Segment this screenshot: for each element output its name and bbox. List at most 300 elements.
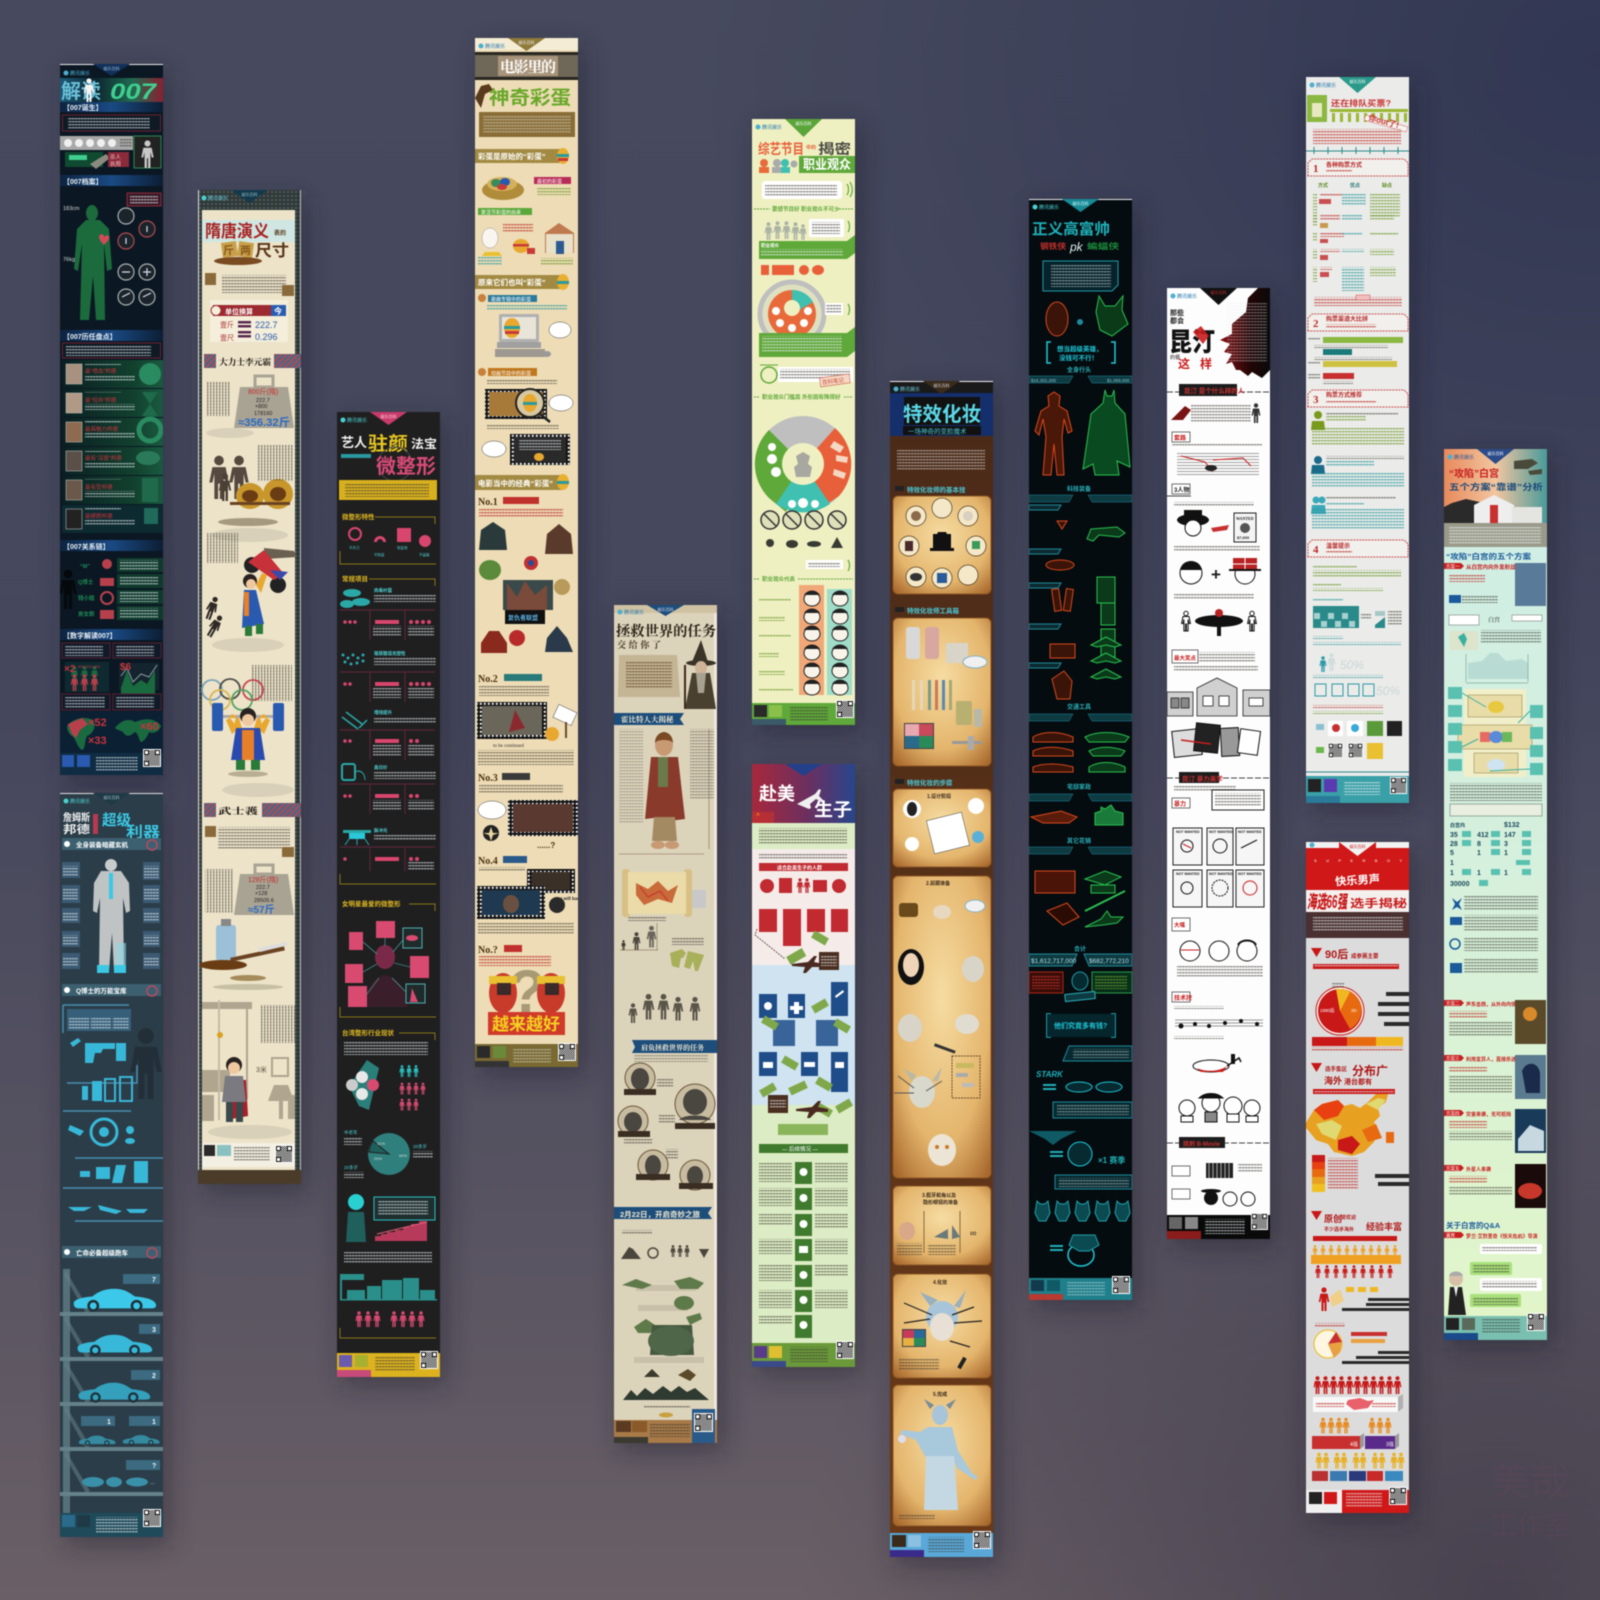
green bar: — 后续情况 — xyxy=(782,1145,819,1153)
weight graphic: 222.7 xyxy=(256,885,270,891)
watermark: studio mark xyxy=(1480,1460,1571,1583)
section 3: 特效化妆的步骤 xyxy=(907,778,953,787)
olympic rings xyxy=(202,679,263,710)
plan 5: 外星人来袭 xyxy=(1466,1166,1491,1173)
section 2 xyxy=(1308,314,1408,331)
tag xyxy=(478,294,537,303)
warrior: 3米 xyxy=(256,1065,267,1074)
sign xyxy=(545,704,577,741)
apps xyxy=(1313,705,1402,759)
section 4: 4 xyxy=(1313,544,1319,556)
recommendation 2 xyxy=(1311,456,1404,487)
footer xyxy=(60,1509,163,1537)
heading: 武士彟: 武士彟 xyxy=(218,806,259,816)
fence line xyxy=(1306,147,1409,154)
stethoscope and note: 百科笔记 xyxy=(822,376,845,387)
header tab: 娱乐百科 xyxy=(242,191,258,197)
intro box xyxy=(339,480,437,500)
footer xyxy=(890,1531,993,1557)
panel: step 1 design: 1.设计阶段 xyxy=(927,793,951,800)
red scene xyxy=(1174,1036,1241,1072)
icons: attribute circles xyxy=(118,208,155,305)
hero header: 腾讯娱乐 xyxy=(1454,454,1474,461)
No.7: No.? xyxy=(478,945,498,956)
relationship rows: Q博士 xyxy=(78,578,94,586)
table header: 缺点 xyxy=(1382,182,1392,189)
section 3: 电影当中的经典“彩蛋” xyxy=(478,478,553,488)
heading: QA: 关于白宫的Q&A xyxy=(1446,1220,1501,1230)
weight graphic xyxy=(234,376,294,429)
motorcycle xyxy=(244,548,297,593)
footer xyxy=(614,1409,717,1443)
note xyxy=(825,303,850,315)
tag xyxy=(478,368,537,377)
icons row xyxy=(761,265,824,275)
red bar xyxy=(759,863,848,872)
tags xyxy=(759,999,853,1117)
QA speaker: 罗兰·艾默里奇《惊天危机》导演 xyxy=(1466,1233,1538,1240)
tag: 复活节彩蛋的由来 xyxy=(481,209,521,216)
film and alarm xyxy=(478,800,578,850)
annotations xyxy=(619,729,714,824)
bracket slogan: 想当超级英雄， xyxy=(1057,344,1102,353)
list: six actors: 最“嗜血”邦德 xyxy=(85,367,117,375)
icon: egg xyxy=(557,148,569,164)
section bar: 昆汀 暴力美学 xyxy=(1182,774,1223,783)
stacked bar xyxy=(1312,1037,1403,1051)
title xyxy=(1307,95,1408,132)
item 5: 脉冲光: 脉冲光 xyxy=(374,827,388,834)
info bar xyxy=(1063,1046,1132,1061)
plan 4 xyxy=(1444,1109,1546,1153)
journey map xyxy=(622,1277,709,1418)
section 2: 原来它们也叫“彩蛋” xyxy=(478,277,546,287)
figure: Iron Man xyxy=(1035,392,1072,475)
title: 还在排队买票? xyxy=(1331,98,1391,108)
wanted icons xyxy=(1181,839,1257,896)
title: 正义高富帅 xyxy=(1032,220,1110,238)
footer xyxy=(1306,772,1409,803)
gear xyxy=(1029,505,1075,699)
section 2: 特效化妆师工具箱 xyxy=(907,606,960,615)
people counts xyxy=(399,1065,426,1110)
faces xyxy=(1180,940,1257,961)
room scene xyxy=(202,1002,295,1121)
header tab xyxy=(756,119,822,137)
heading: 原创: 原创 xyxy=(1324,1213,1342,1224)
label: 合计: $1,612,717,000 xyxy=(1031,958,1077,965)
item 3: 埋线 xyxy=(340,709,436,760)
figures and hammers xyxy=(209,456,293,526)
boy xyxy=(242,573,267,636)
No.1 xyxy=(478,497,563,517)
numbers: 1 xyxy=(1477,870,1481,877)
icons: prohibitions xyxy=(761,511,846,529)
item 4: 美白 xyxy=(340,764,436,814)
text xyxy=(1174,786,1236,792)
title: 钢铁侠 xyxy=(1040,241,1066,251)
section 2 xyxy=(475,274,569,290)
text column 4 xyxy=(261,1005,295,1043)
legend xyxy=(1312,1155,1358,1192)
illustration: Avengers xyxy=(479,522,573,653)
bracket slogan: 没钱可不行！ xyxy=(1059,353,1098,362)
header tab xyxy=(64,64,130,77)
item 3: 埋线: 埋线提升 xyxy=(374,709,392,716)
tag: 技术控 xyxy=(1174,994,1192,1002)
section 2: 2 xyxy=(1313,318,1319,330)
header tab xyxy=(340,412,407,425)
numbers: 8 xyxy=(1477,841,1481,848)
relationship rows: 钱小姐 xyxy=(78,594,95,602)
text xyxy=(634,1055,708,1062)
section heading: Q博士 xyxy=(62,984,161,996)
watermark: studio mark: magi-design.com xyxy=(1480,1571,1564,1583)
building and basketball: ×1 赛季 xyxy=(1098,1155,1125,1165)
panel: step 4 makeup: 4.化妆 xyxy=(933,1279,947,1286)
list: six actors: 最有“深度”邦德 xyxy=(85,454,122,462)
numbers: 1 xyxy=(1477,850,1481,857)
numbers: 30000 xyxy=(1450,881,1470,888)
scroll roller xyxy=(198,1170,301,1184)
section: 女明星 xyxy=(342,899,435,911)
header tab: 腾讯娱乐 xyxy=(1039,204,1059,211)
section 1 xyxy=(1308,159,1408,176)
ribbons xyxy=(618,1089,715,1189)
title xyxy=(341,433,437,481)
plus group xyxy=(1174,546,1261,584)
scaffold xyxy=(60,1269,163,1513)
conversion box: 222.7 xyxy=(255,320,278,330)
intro box xyxy=(1043,261,1118,291)
QA speaker xyxy=(1444,1232,1538,1240)
section 4 xyxy=(1308,540,1408,557)
section: 档案 xyxy=(60,175,163,186)
portraits xyxy=(618,1063,715,1190)
wanted captions: NOT WANTED xyxy=(1176,830,1200,834)
extras: guard icons xyxy=(1450,896,1538,973)
cowboy and wanted: WANTED xyxy=(1236,516,1254,521)
gadgets: pipeline and items xyxy=(63,1005,163,1221)
title: 职业观众 xyxy=(803,157,851,172)
section: 关系链 xyxy=(60,540,163,551)
gear green xyxy=(1087,527,1125,679)
item 1: 肉毒杆菌: 肉毒杆菌 xyxy=(374,587,392,594)
tag: 歌曲专辑中的彩蛋 xyxy=(491,296,531,303)
diagram: face procedures xyxy=(345,921,429,1007)
table xyxy=(1450,804,1542,816)
text column 3 xyxy=(252,665,292,701)
section bar xyxy=(1167,384,1270,396)
panel: step 3 teeth and horns: ∞ xyxy=(970,1228,976,1238)
item 1: 肉毒杆菌 xyxy=(340,587,436,640)
follow-up rows xyxy=(759,1162,848,1338)
section: 常规项目: 常规项目 xyxy=(342,574,368,583)
right labels xyxy=(1342,1351,1409,1364)
bubble xyxy=(549,395,573,411)
section: 诞生: 【007诞生】 xyxy=(63,103,103,112)
footer xyxy=(1444,1313,1547,1340)
section: 女明星: 女明星最爱的微整形 xyxy=(342,899,401,908)
bar chart xyxy=(1308,337,1403,384)
silhouettes row xyxy=(629,994,700,1023)
section heading: 全身装备 xyxy=(62,838,161,850)
section 1: 1 xyxy=(1313,163,1318,175)
No.4: No.4 xyxy=(478,856,498,867)
vertical text xyxy=(206,382,230,416)
section heading xyxy=(754,393,853,401)
wanted captions: NOT WANTED xyxy=(1209,872,1233,876)
plan 2: 方案二 xyxy=(1446,1000,1460,1007)
title: 隋唐演义 xyxy=(205,221,269,241)
title xyxy=(202,220,295,265)
item 2: 玻尿酸 xyxy=(340,650,436,702)
label: 全身行头: $16,302,200 xyxy=(1031,378,1057,383)
red header: 娱乐百科 xyxy=(1350,843,1366,849)
panel: step 1 design xyxy=(893,789,991,867)
section bar xyxy=(1167,1137,1270,1148)
portrait box xyxy=(134,136,161,168)
film credits xyxy=(510,434,570,465)
wanted captions xyxy=(1176,830,1262,876)
panel: step 3 teeth and horns: 3.假牙和角以及 xyxy=(922,1192,956,1199)
tag xyxy=(1172,918,1190,931)
plan 2: 声东击西，从外向内强攻 xyxy=(1466,1001,1521,1008)
pin and note xyxy=(1449,595,1498,603)
list: six actors: 最有型邦德 xyxy=(85,483,113,491)
panel: 解读007 infographic xyxy=(59,63,164,776)
shirts xyxy=(670,937,704,971)
city skyline xyxy=(340,1274,437,1300)
bubble xyxy=(549,322,571,338)
section: 常规项目 xyxy=(342,574,435,586)
intro xyxy=(897,450,985,470)
show boxes xyxy=(1312,1433,1399,1449)
tag xyxy=(478,208,532,216)
heading: 原创: 受欢迎 xyxy=(1341,1214,1356,1221)
icons: warnings xyxy=(766,537,843,548)
callout xyxy=(127,193,161,206)
title xyxy=(1032,220,1119,254)
people: red tall xyxy=(1314,1376,1401,1394)
label: 合计 xyxy=(1029,945,1132,966)
figure: suited man xyxy=(93,859,130,973)
section bar: 挑刺 B-Movie xyxy=(1183,1140,1221,1148)
No.7 xyxy=(478,945,551,966)
panel: step 3 teeth and horns: 隐形眼镜的准备 xyxy=(923,1199,958,1206)
weightlifter xyxy=(212,703,284,777)
label: 全身行头: 全身行头 xyxy=(1067,366,1091,374)
title: 邦德 xyxy=(63,822,90,836)
caption xyxy=(487,379,557,384)
illustration: eggs with question mark: ? xyxy=(509,958,545,1025)
heads xyxy=(1046,296,1128,336)
title band xyxy=(752,764,855,823)
text column xyxy=(205,869,233,913)
title: “攻陷”白宫 xyxy=(1449,467,1499,480)
title: 一场神奇的变脸魔术 xyxy=(908,426,967,436)
wanted captions: NOT WANTED xyxy=(1209,830,1233,834)
section 2: 购票渠道大比拼 xyxy=(1326,315,1368,323)
poster xyxy=(1515,563,1546,606)
red header: 快乐男声 xyxy=(1335,871,1380,889)
title band: 生子 xyxy=(814,800,852,820)
conversion box: 单位换算 xyxy=(225,307,253,316)
table header: 优点 xyxy=(1350,182,1360,189)
section heading: 职业观众门槛高 外形固有降得好 xyxy=(762,393,841,401)
heading: 选手集区: 海外 xyxy=(1324,1075,1342,1086)
footer xyxy=(475,1043,578,1067)
tag: 大嘴 xyxy=(1174,921,1186,929)
red header xyxy=(1306,842,1409,890)
figure: agent silhouette xyxy=(63,205,112,320)
estates xyxy=(1031,805,1123,825)
tag and note: 暴力 xyxy=(1174,800,1186,808)
title: 神奇彩蛋 xyxy=(475,84,571,109)
recommendation 3 xyxy=(1311,496,1404,529)
hero header: 娱乐百科 xyxy=(1488,450,1504,456)
header tab: 腾讯娱乐 xyxy=(1177,293,1197,300)
icons: features: 恢复快 xyxy=(397,545,408,550)
bubble xyxy=(482,441,506,457)
list notes xyxy=(759,598,793,692)
list: six actors: 最硬朗邦德 xyxy=(85,512,113,520)
tag and note xyxy=(1172,790,1264,810)
hero header xyxy=(1444,449,1547,523)
wanted captions: NOT WANTED xyxy=(1176,872,1200,876)
people: orange block xyxy=(1311,1245,1401,1264)
film and alarm: ......? xyxy=(537,841,555,850)
plan 5 xyxy=(1444,1164,1546,1208)
title: 中的 xyxy=(806,144,816,151)
section: 台湾 xyxy=(342,1028,435,1040)
right labels xyxy=(1375,1174,1409,1186)
portrait silhouettes xyxy=(624,1068,711,1186)
stats: figures and chart: $6 xyxy=(120,662,132,673)
footer xyxy=(1167,1213,1270,1239)
blood splash xyxy=(1220,288,1270,378)
gun panel xyxy=(65,152,129,169)
tips with figures: 50% xyxy=(1376,684,1400,698)
title: 利器 xyxy=(126,824,160,841)
heading: 选手集区: 港台都有 xyxy=(1344,1077,1372,1086)
map and note xyxy=(1450,630,1541,650)
heading: 大力士李元霸: 大力士李元霸 xyxy=(219,357,271,367)
footer xyxy=(60,749,163,775)
plan 2 xyxy=(1444,1000,1546,1044)
cars xyxy=(74,1289,160,1487)
intro band xyxy=(479,112,575,137)
pie chart: 20多岁 xyxy=(344,1164,358,1171)
header tab: 腾讯娱乐 xyxy=(70,798,90,805)
table header: 方式 xyxy=(1318,182,1328,189)
guitarist xyxy=(1319,1287,1378,1311)
numbers: 1 xyxy=(1450,860,1454,867)
header tab xyxy=(614,605,717,616)
label: 交通工具: 交通工具 xyxy=(1067,703,1091,711)
caption and text xyxy=(478,744,574,765)
No.3 xyxy=(478,773,563,793)
info tables xyxy=(1449,615,1542,625)
header tab xyxy=(202,190,268,203)
weight graphic: 128斤(隋) xyxy=(248,875,278,884)
heading: 选手集区 xyxy=(1311,1063,1395,1094)
section heading: Q博士: Q博士的万能宝库 xyxy=(76,986,127,995)
number icons xyxy=(1462,831,1531,886)
label: 全身行头 xyxy=(1029,366,1132,383)
header tab xyxy=(475,38,578,51)
section heading xyxy=(754,205,853,213)
section 2 xyxy=(895,606,960,615)
section 3 xyxy=(895,778,953,787)
conversion box: 壹尺 xyxy=(220,333,234,342)
title: 这样 xyxy=(1178,356,1212,371)
plan 4: 灾害来袭，无可抵挡 xyxy=(1466,1111,1511,1118)
panel: 赴美生子 xyxy=(751,763,856,1368)
icons: features xyxy=(349,528,431,557)
title: 交给你了 xyxy=(617,639,661,650)
clouds xyxy=(206,428,294,797)
title: 拯救世界的任务 xyxy=(616,623,716,640)
plan 1 tag: 方案一 xyxy=(1446,563,1460,570)
label: 其它花销: 其它花销 xyxy=(1067,837,1091,845)
numbers: 3 xyxy=(1504,841,1508,848)
ring equation xyxy=(1050,1235,1099,1266)
film strip xyxy=(477,702,547,739)
tips xyxy=(1313,565,1401,601)
heading: 原创: 经验丰富 xyxy=(1366,1221,1402,1232)
section 1 xyxy=(895,485,966,494)
gun panel: 杀人 xyxy=(110,153,122,161)
label: 合计: 合计 xyxy=(1074,945,1086,953)
numbers xyxy=(1450,822,1520,888)
caption and text: to be continued xyxy=(493,744,524,749)
stage box xyxy=(1313,1394,1403,1412)
section 4: 温馨提示 xyxy=(1326,542,1350,550)
process: blue boxes xyxy=(759,982,848,1092)
heading: 选手集区: 选手集区 xyxy=(1325,1065,1348,1073)
plan 1 tag: 从白宫内向外发射战区 xyxy=(1466,563,1522,571)
count labels xyxy=(81,1274,160,1470)
banner: 肩负拯救世界的任务 xyxy=(641,1043,704,1052)
section heading: 全身装备: 全身装备暗藏玄机 xyxy=(76,840,128,849)
info bar xyxy=(1055,1175,1132,1189)
right labels xyxy=(1342,1298,1409,1311)
clock chart xyxy=(760,282,824,346)
intro band xyxy=(1306,912,1409,938)
green bar xyxy=(759,1144,848,1153)
pie chart: 31% xyxy=(377,1141,385,1146)
header tab: 娱乐百科 xyxy=(1350,78,1366,84)
conversion box: 壹斤 xyxy=(220,320,234,329)
title: 综艺节目 xyxy=(758,141,804,157)
conversion box xyxy=(210,300,288,342)
section 3: 3 xyxy=(1313,394,1319,406)
numbers: 1 xyxy=(1504,850,1508,857)
pie chart: 中老年 xyxy=(344,1129,358,1136)
tag xyxy=(1167,484,1191,496)
wanted captions: NOT WANTED xyxy=(1238,830,1262,834)
cars xyxy=(1033,732,1129,772)
item 5: 脉冲光 xyxy=(340,827,436,871)
people: red block xyxy=(1315,1265,1393,1278)
intro box xyxy=(62,115,160,131)
footer xyxy=(752,1341,855,1367)
No.2: No.2 xyxy=(478,674,498,685)
count labels: ? xyxy=(152,1463,156,1470)
panel: step 3 teeth and horns xyxy=(893,1186,991,1265)
bar chart xyxy=(375,1221,427,1241)
